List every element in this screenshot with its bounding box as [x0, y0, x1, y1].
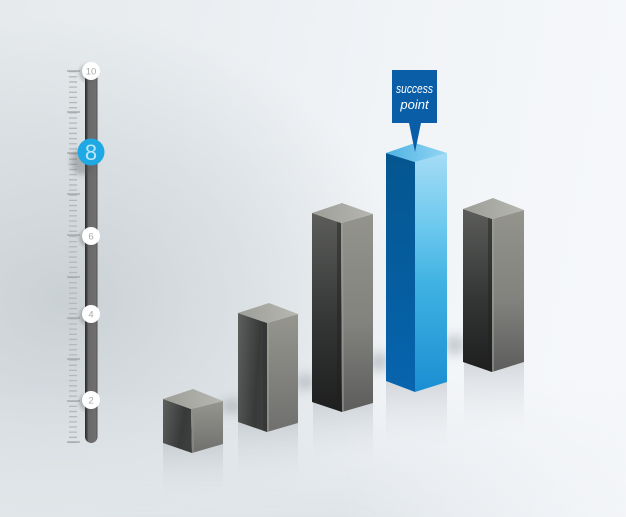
- knob: 10: 10: [86, 66, 96, 78]
- knob: 4: 4: [88, 310, 94, 320]
- bar 5: gray: [463, 198, 524, 372]
- bar contact shadows: [220, 336, 464, 412]
- callout: success point: point: [399, 97, 430, 112]
- knob: 2: 2: [88, 396, 94, 406]
- bar 3: gray: [312, 203, 373, 412]
- bar 1: gray cube: [163, 389, 223, 453]
- slider scale: [67, 62, 104, 443]
- knob: 10: [79, 62, 100, 82]
- knob: 8 highlighted: 8: [85, 140, 97, 165]
- knob: 4: [79, 305, 100, 325]
- bar 4: blue success bar: [386, 143, 447, 392]
- callout: success point: [392, 70, 437, 152]
- slider track: [85, 72, 98, 443]
- bar reflections on the floor: [163, 362, 524, 500]
- bar 2: gray: [238, 303, 298, 432]
- callout: success point: success: [396, 81, 433, 96]
- knob: 6: [79, 227, 100, 247]
- knob: 8 highlighted: [71, 138, 104, 175]
- scale ticks: [67, 71, 80, 443]
- knob: 2: [79, 391, 100, 411]
- knob: 6: 6: [88, 232, 94, 242]
